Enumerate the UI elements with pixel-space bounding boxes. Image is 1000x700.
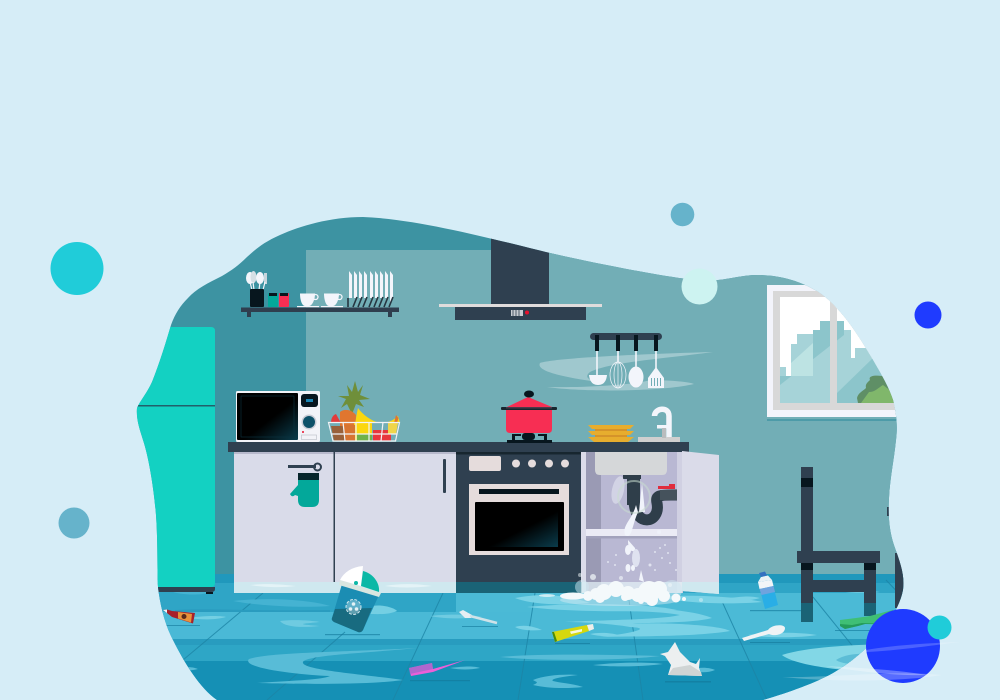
towel rail	[288, 464, 321, 470]
circle: pale	[682, 268, 718, 304]
sink bowl	[595, 452, 667, 475]
second chair edge	[887, 507, 905, 608]
circle: blue large	[866, 609, 940, 683]
oven	[456, 452, 582, 593]
orange tip	[394, 415, 398, 422]
hanging utensils rack	[589, 333, 664, 388]
cabinet handle	[443, 459, 446, 493]
spatula	[648, 367, 664, 388]
recycling symbol	[346, 600, 361, 614]
ladle	[589, 375, 607, 385]
spoon	[628, 366, 644, 388]
kitchen scene clipped to blob	[130, 210, 916, 700]
fruit basket	[328, 381, 400, 441]
cabinets	[234, 452, 456, 593]
pineapple	[340, 410, 356, 435]
red jar	[279, 293, 289, 307]
pineapple leaves	[338, 381, 370, 414]
window	[767, 285, 907, 421]
basket contents	[331, 426, 345, 441]
steam	[540, 352, 713, 390]
oven mitt	[290, 473, 319, 507]
cup right	[321, 294, 343, 307]
whisk	[610, 362, 626, 388]
water streaks over circle	[782, 642, 960, 681]
floor	[130, 574, 910, 700]
utensils	[246, 271, 267, 290]
upper wall above hood	[549, 252, 582, 260]
object shadows	[164, 610, 895, 682]
utensil cup	[250, 289, 264, 307]
cooking pot	[501, 390, 557, 443]
shrub	[857, 376, 896, 403]
water bottle	[758, 572, 778, 609]
crumpled paper	[660, 642, 702, 676]
open cabinet door	[682, 451, 719, 594]
recycling bin	[332, 566, 381, 632]
green cloth	[840, 610, 900, 629]
foam	[539, 573, 703, 606]
fridge	[130, 327, 215, 594]
comb	[409, 660, 465, 676]
circle: muted top	[671, 203, 694, 226]
range hood	[439, 236, 602, 320]
shelf with crockery	[241, 271, 399, 317]
faucet	[638, 409, 680, 442]
leaking water	[607, 475, 677, 582]
microwave	[236, 391, 320, 442]
stacked plates	[588, 425, 634, 442]
watermelon	[331, 414, 340, 422]
waterline on cabinets	[234, 582, 719, 594]
light wall panel	[306, 250, 916, 580]
toothpaste tube	[552, 624, 594, 642]
skyline	[780, 330, 882, 403]
water reflections	[170, 587, 885, 688]
drain pipe	[623, 475, 677, 520]
under-sink cabinet	[581, 452, 683, 593]
ketchup bottle	[163, 610, 195, 624]
circle: cyan small	[928, 616, 952, 640]
circle: muted left	[58, 508, 90, 538]
spoon on floor	[742, 625, 785, 641]
counter	[228, 442, 689, 452]
cup left	[297, 294, 319, 307]
fork	[459, 610, 497, 623]
circle: blue right	[914, 302, 942, 328]
chair	[797, 467, 880, 622]
circle: cyan left	[50, 242, 104, 295]
plates rack	[348, 271, 393, 307]
wire basket	[328, 422, 400, 441]
illustration: flooded kitchen	[50, 202, 952, 700]
shelf board	[241, 308, 399, 317]
back wall	[130, 210, 910, 580]
bananas	[356, 408, 400, 422]
teal jar	[268, 293, 278, 307]
